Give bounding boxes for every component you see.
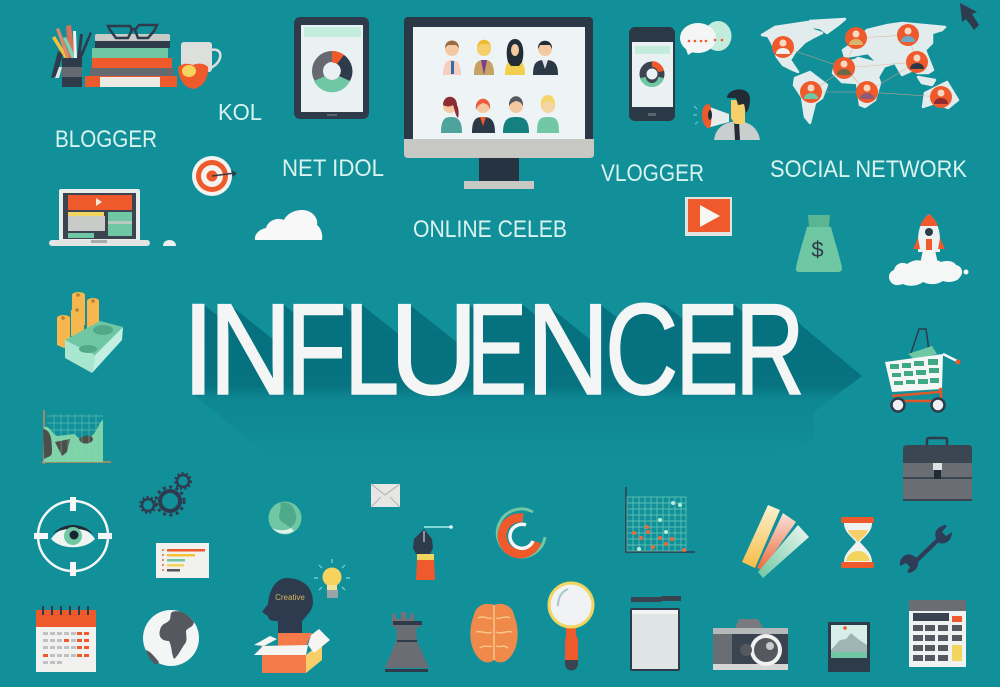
title: INFLUENCER bbox=[182, 276, 805, 423]
icon: green globe bbox=[268, 502, 302, 534]
icon: light bulb bbox=[314, 559, 350, 598]
icon: pencils, books, glasses and mug bbox=[51, 25, 220, 89]
icon: man with megaphone bbox=[693, 89, 760, 140]
label: VLOGGER: VLOGGER bbox=[601, 160, 704, 187]
continents bbox=[762, 19, 958, 123]
person 5 bbox=[441, 97, 462, 133]
long shadow of title bbox=[194, 305, 862, 406]
icon: calculator bbox=[909, 600, 966, 667]
icon: cursor arrow bbox=[960, 3, 979, 30]
icon: framed picture bbox=[828, 622, 870, 672]
icon: tablet with donut chart bbox=[294, 17, 369, 119]
person 7 bbox=[503, 96, 529, 133]
icon: smartphone with chart bbox=[629, 27, 675, 121]
title: INFLUENCER: L bbox=[344, 276, 399, 422]
person pins bbox=[772, 24, 952, 108]
icon: briefcase bbox=[903, 438, 972, 501]
network links bbox=[783, 35, 941, 97]
icon: chess rook bbox=[385, 612, 429, 672]
icon: coins and cash bbox=[57, 292, 123, 373]
icon: envelope bbox=[371, 484, 400, 507]
icon: area line chart bbox=[42, 410, 111, 464]
icon: wrench bbox=[900, 525, 952, 573]
icon: shopping cart bbox=[885, 329, 960, 412]
icon: eye in crosshair bbox=[34, 497, 112, 576]
icon: bar list card bbox=[156, 543, 209, 578]
label: KOL: KOL bbox=[218, 99, 262, 125]
title: INFLUENCER: E bbox=[675, 278, 739, 423]
person 8 bbox=[537, 95, 559, 133]
icon: scatter chart bbox=[626, 487, 695, 552]
title: INFLUENCER: U bbox=[389, 276, 478, 422]
icon: brain bbox=[470, 604, 518, 662]
icon: digital camera bbox=[713, 619, 788, 670]
label: NET IDOL: NET IDOL bbox=[282, 155, 384, 182]
icon: earth globe bbox=[143, 610, 199, 666]
icon: fountain pen nib bbox=[413, 525, 453, 580]
icon: video play button bbox=[685, 197, 732, 236]
title: INFLUENCER: F bbox=[286, 276, 347, 422]
icon: magnifying glass bbox=[549, 583, 593, 670]
icon: creative head in open box bbox=[254, 578, 330, 673]
icon: desktop monitor with people bbox=[404, 17, 594, 189]
label: BLOGGER: BLOGGER bbox=[55, 126, 157, 153]
title: INFLUENCER: E bbox=[466, 276, 527, 422]
icon: creative head in open box: Creative bbox=[275, 593, 305, 602]
icon: money bag bbox=[796, 215, 842, 272]
person 2 bbox=[474, 40, 494, 75]
label: ONLINE CELEB: ONLINE CELEB bbox=[413, 216, 567, 243]
title: INFLUENCER: R bbox=[735, 277, 805, 422]
icon: money bag: $ bbox=[811, 237, 824, 262]
person 6 bbox=[472, 99, 495, 133]
icon: notebook and pen bbox=[630, 596, 681, 671]
person 1 bbox=[443, 40, 461, 75]
icon: laptop with video page bbox=[49, 189, 176, 246]
icon: rocket launch bbox=[889, 214, 968, 286]
person 4 bbox=[533, 41, 558, 75]
icon: gears bbox=[140, 473, 191, 515]
icon: hourglass bbox=[841, 517, 874, 568]
title: INFLUENCER: I bbox=[182, 277, 215, 422]
title: INFLUENCER: N bbox=[209, 277, 292, 422]
title: INFLUENCER: N bbox=[526, 277, 610, 422]
label: SOCIAL NETWORK: SOCIAL NETWORK bbox=[770, 156, 967, 183]
icon: circular progress chart bbox=[497, 509, 545, 557]
world map with connected people bbox=[762, 19, 958, 123]
icon: cloud bbox=[255, 210, 322, 240]
person 3 bbox=[505, 39, 525, 75]
icon: colour swatches bbox=[742, 505, 809, 578]
icon: target with arrow bbox=[192, 156, 237, 196]
icon: speech bubbles bbox=[680, 21, 732, 55]
icon: calendar bbox=[36, 606, 96, 672]
title: INFLUENCER: C bbox=[605, 276, 678, 422]
